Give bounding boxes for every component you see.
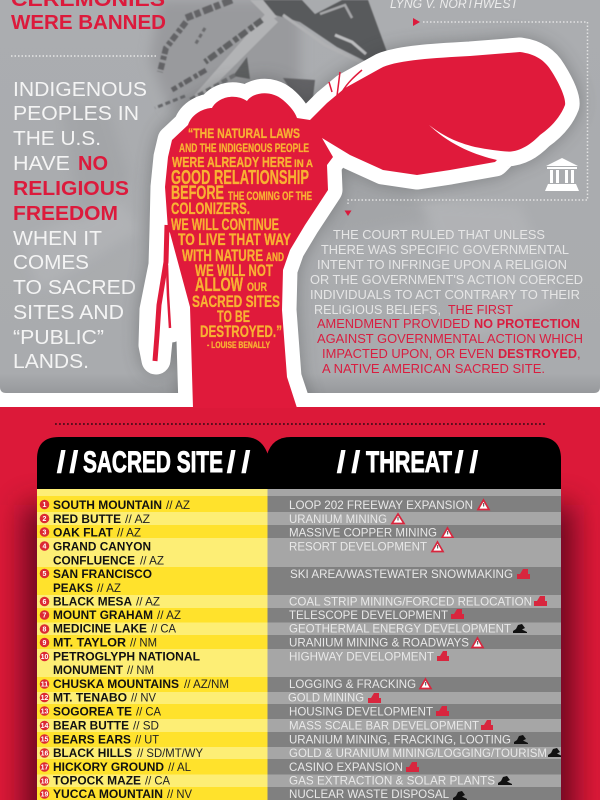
row 13 [37, 704, 561, 719]
row 1: SOUTH MOUNTAIN [53, 498, 162, 512]
row 11 [37, 677, 561, 692]
text block: no religious freedom: FREEDOM [13, 203, 118, 225]
row 15: BEARS EARS [53, 732, 131, 746]
row 9: 9 [43, 640, 47, 647]
row 5 [37, 567, 561, 595]
row 7 [37, 608, 561, 622]
row 14: MASS SCALE BAR DEVELOPMENT [289, 718, 480, 732]
text block: court ruling: IMPACTED UPON, OR EVEN [322, 346, 494, 361]
row 10: PETROGLYPH NATIONAL [53, 650, 200, 664]
row 18 [37, 774, 561, 788]
row 6: COAL STRIP MINING/FORCED RELOCATION [289, 594, 532, 608]
row 14: BEAR BUTTE [53, 718, 129, 732]
table drop shadow [24, 505, 574, 800]
row 2: RED BUTTE [53, 512, 121, 526]
row 8: GEOTHERMAL ENERGY DEVELOPMENT [289, 622, 512, 636]
row 5: // AZ [97, 581, 121, 595]
quote: Louise Benally: OUR [247, 280, 267, 294]
row 4: RESORT DEVELOPMENT [289, 540, 428, 554]
text block: court ruling: RELIGIOUS BELIEFS, [314, 302, 441, 317]
row 1: // AZ [166, 498, 190, 512]
row 17: 17 [41, 764, 48, 772]
white band [0, 385, 600, 407]
row 7: 7 [43, 612, 47, 620]
row 8: 8 [43, 626, 47, 634]
quote: Louise Benally: BEFORE [171, 182, 224, 204]
text block: no religious freedom: LANDS. [13, 351, 89, 373]
row 3: 3 [43, 530, 47, 536]
row 3: MASSIVE COPPER MINING [289, 526, 437, 540]
text block: no religious freedom: SITES AND [13, 302, 124, 324]
row 15: 15 [41, 736, 48, 744]
header: sacred site: SACRED SITE [83, 446, 223, 479]
row 9 [37, 635, 561, 650]
quote: Louise Benally: IN A [294, 158, 313, 170]
row 12: 12 [41, 695, 48, 702]
row 13: SOGOREA TE [53, 704, 132, 718]
row 2: // AZ [125, 512, 150, 526]
row 17 [37, 759, 561, 774]
row 10: 10 [41, 654, 48, 661]
text block: no religious freedom: HAVE [13, 153, 70, 175]
heading: ceremonies were banned [11, 0, 166, 34]
row 6: // AZ [136, 594, 160, 608]
quote: Louise Benally: WERE ALREADY HERE [172, 155, 292, 171]
text block: no religious freedom: RELIGIOUS [13, 178, 129, 200]
row 13: 13 [41, 708, 48, 716]
row 15: // UT [135, 732, 160, 746]
text block: no religious freedom: WHEN IT [13, 228, 102, 250]
quote: Louise Benally: DESTROYED.” [200, 322, 282, 341]
row 3 [37, 525, 561, 540]
header: threat: // [455, 446, 479, 479]
row 18: TOPOCK MAZE [53, 774, 141, 788]
header: threat: THREAT [366, 446, 452, 479]
arrow: dotted connector from case name to ruling [344, 18, 588, 216]
text block: no religious freedom: TO SACRED [13, 277, 136, 299]
quote: Louise Benally: WE WILL NOT [195, 262, 273, 280]
row 4 [37, 538, 561, 568]
illustration: raised fist holding feather [131, 30, 588, 407]
heading: ceremonies were banned: WERE BANNED [11, 12, 166, 34]
table: sacred sites and threats [37, 437, 561, 800]
row 8 [37, 622, 561, 636]
row 10: HIGHWAY DEVELOPMENT [289, 650, 435, 664]
text block: court ruling: INDIVIDUALS TO ACT CONTRARY TO THEIR [310, 287, 580, 302]
row 5: PEAKS [53, 581, 93, 595]
row 14 [37, 718, 561, 732]
row 12: // NV [131, 690, 156, 704]
row 7: TELESCOPE DEVELOPMENT [289, 608, 449, 622]
row 2: URANIUM MINING [289, 512, 387, 526]
header: sacred site [37, 437, 268, 490]
text block: court ruling: NO PROTECTION [474, 316, 580, 331]
text block: no religious freedom: THE U.S. [13, 128, 101, 150]
row 4: CONFLUENCE [53, 554, 135, 568]
row 7: MOUNT GRAHAM [53, 608, 153, 622]
row 18: // CA [145, 774, 170, 788]
row 4: 4 [43, 544, 47, 550]
row 16 [37, 746, 561, 760]
row 16: BLACK HILLS [53, 746, 132, 760]
row 12: MT. TENABO [53, 690, 127, 704]
row 18: GAS EXTRACTION & SOLAR PLANTS [289, 774, 495, 788]
text block: court ruling: DESTROYED [498, 346, 577, 361]
row 3: // AZ [117, 526, 141, 540]
text block: court ruling: , [577, 346, 581, 361]
quote: Louise Benally: COLONIZERS. [171, 199, 250, 218]
header: sacred site: // [227, 446, 251, 479]
text block: court ruling: THERE WAS SPECIFIC GOVERNMENTAL [321, 242, 569, 257]
quote: Louise Benally: SACRED SITES [192, 293, 280, 311]
row 4: // AZ [140, 554, 164, 568]
text block: court ruling: THE COURT RULED THAT UNLESS [333, 227, 545, 242]
text block: court ruling: OR THE GOVERNMENT'S ACTION COERCED [310, 272, 583, 287]
row 8: MEDICINE LAKE [53, 622, 147, 636]
text block: court ruling: A NATIVE AMERICAN SACRED SITE. [322, 361, 545, 376]
text block: court ruling [310, 227, 583, 376]
quote: Louise Benally: AND [266, 252, 284, 264]
text block: no religious freedom: “PUBLIC” [13, 327, 104, 349]
text block: no religious freedom: COMES [13, 252, 89, 274]
quote: Louise Benally: WITH NATURE [182, 247, 263, 265]
row 13: // CA [136, 704, 161, 718]
quote: Louise Benally: TO BE [217, 308, 250, 326]
row 16: GOLD & URANIUM MINING/LOGGING/TOURISM [289, 746, 547, 760]
quote: Louise Benally: ALLOW [195, 275, 243, 296]
row 6: 6 [43, 599, 47, 606]
row 10 [37, 649, 561, 677]
row 1: LOOP 202 FREEWAY EXPANSION [289, 498, 473, 512]
quote: Louise Benally: AND THE INDIGENOUS PEOPLE [179, 143, 309, 155]
row 8: // CA [151, 622, 176, 636]
row 7: // AZ [157, 608, 181, 622]
panel: grey photo background [0, 0, 600, 393]
row 12: GOLD MINING [288, 690, 364, 704]
dotted divider [11, 55, 156, 57]
row 19 [37, 787, 561, 800]
quote: Louise Benally: WE WILL CONTINUE [171, 216, 279, 234]
text block: no religious freedom: NO [78, 153, 108, 175]
text block: court ruling: AMENDMENT PROVIDED [317, 316, 470, 331]
row 10: MONUMENT [53, 663, 124, 677]
row 3: OAK FLAT [53, 526, 114, 540]
table top strip [37, 489, 561, 496]
row 11: LOGGING & FRACKING [289, 677, 416, 691]
text block: no religious freedom: PEOPLES IN [13, 103, 139, 125]
dotted divider above table [55, 423, 547, 425]
row 5: SAN FRANCISCO [53, 567, 152, 581]
row 4: GRAND CANYON [53, 540, 151, 554]
text block: no religious freedom: INDIGENOUS [13, 79, 147, 101]
text block: court ruling: AGAINST GOVERNMENTAL ACTION WHICH [317, 331, 583, 346]
row 19: 19 [41, 792, 48, 798]
row 9: URANIUM MINING & ROADWAYS [289, 636, 469, 650]
row 18: 18 [41, 778, 48, 786]
row 17: // AL [168, 760, 191, 774]
row 11: // AZ/NM [184, 677, 229, 691]
row 16: // SD/MT/WY [137, 746, 203, 760]
row 15 [37, 732, 561, 747]
row 14: 14 [41, 723, 48, 730]
quote: Louise Benally: “THE NATURAL LAWS [188, 125, 300, 141]
text block: no religious freedom [13, 79, 147, 373]
row 15: URANIUM MINING, FRACKING, LOOTING [289, 732, 511, 746]
row 6: BLACK MESA [53, 594, 132, 608]
row 10: // NM [127, 663, 154, 677]
header: sacred site: // [57, 446, 79, 479]
row 5: 5 [43, 571, 47, 578]
row 6 [37, 594, 561, 608]
row 17: HICKORY GROUND [53, 760, 164, 774]
text block: court ruling: THE FIRST [448, 302, 513, 317]
row 2: 2 [43, 516, 47, 523]
quote: Louise Benally: THE COMING OF THE [228, 191, 312, 203]
row 17: CASINO EXPANSION [289, 760, 403, 774]
header: threat: // [337, 446, 361, 479]
quote: Louise Benally: GOOD RELATIONSHIP [171, 167, 309, 189]
quote: Louise Benally: TO LIVE THAT WAY [178, 231, 291, 249]
row 14: // SD [133, 718, 159, 732]
icon: courthouse [545, 158, 579, 191]
quote: Louise Benally [171, 125, 313, 350]
row 9: MT. TAYLOR [53, 636, 126, 650]
row 11: 11 [41, 682, 48, 688]
row 2 [37, 512, 561, 526]
row 5: SKI AREA/WASTEWATER SNOWMAKING [290, 567, 513, 581]
row 9: // NM [130, 636, 157, 650]
text block: court ruling: INTENT TO INFRINGE UPON A RELIGION [317, 257, 567, 272]
quote: Louise Benally: - LOUISE BENALLY [207, 340, 270, 350]
row 11: CHUSKA MOUNTAINS [53, 677, 179, 691]
header: threat [267, 437, 561, 490]
row 12 [37, 690, 561, 704]
row 1: 1 [43, 502, 47, 509]
row 13: HOUSING DEVELOPMENT [289, 704, 434, 718]
row 1 [37, 496, 561, 512]
row 16: 16 [41, 750, 48, 758]
